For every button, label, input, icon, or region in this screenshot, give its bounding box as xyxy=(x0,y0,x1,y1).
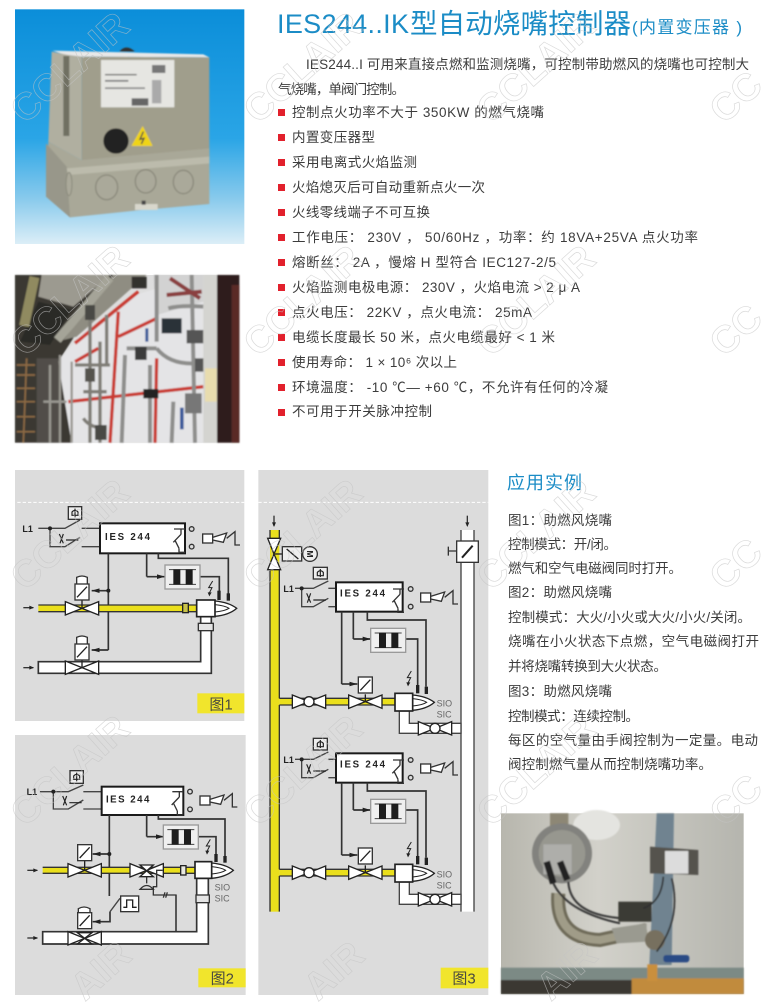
label: L1 input with switches xyxy=(283,738,336,778)
application description text xyxy=(508,512,759,772)
figure label 图1: 图1 xyxy=(209,696,233,713)
icon: spark xyxy=(406,671,411,686)
air pipe xyxy=(23,617,213,674)
burner xyxy=(395,685,434,711)
burner xyxy=(195,854,233,878)
watermark: CC xyxy=(702,297,771,365)
application description text: 图2：助燃风烧嘴 xyxy=(508,584,612,600)
wiring xyxy=(342,783,426,858)
burner zone 1 xyxy=(279,567,461,735)
application description text: 烧嘴在小火状态下点燃，空气电磁阀打开 xyxy=(508,633,759,649)
icon: ignition transformer xyxy=(163,825,198,849)
gas branch xyxy=(279,677,396,708)
SIO SIC labels: SIC xyxy=(437,880,452,890)
gas pipe xyxy=(23,576,198,615)
icon: alarm horn xyxy=(200,794,237,807)
label: L1 input with switches: L1 xyxy=(283,755,294,765)
icon: alarm horn xyxy=(203,532,240,545)
title: (内置变压器 ) xyxy=(632,18,742,37)
panel: diagram 1 xyxy=(15,470,244,721)
label: L1 input with switches: L1 xyxy=(22,524,33,534)
application description text: 控制模式：大火/小火或大火/小火/关闭。 xyxy=(508,610,751,625)
feature bullet list: 控制点火功率不大于 350KW 的燃气烧嘴 xyxy=(292,104,544,120)
intro paragraph: 气烧嘴，单阀门控制。 xyxy=(278,82,405,97)
figure label 图3: 图3 xyxy=(452,970,476,987)
SIO SIC labels: SIC xyxy=(215,893,230,903)
feature bullet list: 火焰熄灭后可自动重新点火一次 xyxy=(292,179,485,195)
control unit IES 244: IES 244 xyxy=(340,759,386,770)
pulse controller xyxy=(110,896,139,912)
control unit IES 244 xyxy=(100,523,194,553)
control unit IES 244 xyxy=(336,582,413,612)
feature bullet list: 环境温度： -10 ℃— +60 ℃，不允许有任何的冷凝 xyxy=(292,380,608,395)
icon: alarm horn xyxy=(421,762,458,775)
watermark: CCLAIR xyxy=(469,237,604,365)
wiring xyxy=(342,612,426,687)
feature bullet list: 使用寿命： 1 × 10⁶ 次以上 xyxy=(292,354,457,370)
watermark: CCLAIR xyxy=(469,471,604,599)
feature bullet list: 不可用于开关脉冲控制 xyxy=(292,404,432,419)
SIO SIC labels xyxy=(437,699,452,719)
icon: ignition transformer xyxy=(371,628,406,652)
control unit IES 244: IES 244 xyxy=(340,588,386,599)
feature bullet list: 点火电压： 22KV ，点火电流： 25mA xyxy=(292,305,532,320)
label: L1 input with switches: L1 xyxy=(283,584,294,594)
main air pipe xyxy=(448,516,478,912)
application description text: 燃气和空气电磁阀同时打开。 xyxy=(508,560,682,576)
SIO SIC labels: SIO xyxy=(437,870,452,880)
application description text: 控制模式：连续控制。 xyxy=(508,709,639,724)
main gas pipe xyxy=(268,516,317,912)
control unit IES 244: IES 244 xyxy=(105,532,151,543)
watermark: CCLAIR xyxy=(236,707,371,835)
feature bullet list: 火焰监测电极电源： 230V ，火焰电流 > 2 μ A xyxy=(292,280,580,295)
label: L1 input with switches xyxy=(283,567,336,607)
burner zone 2 xyxy=(279,738,461,906)
burner xyxy=(395,856,434,882)
main gas pipe: M xyxy=(305,550,315,558)
title xyxy=(277,8,742,39)
icon: spark xyxy=(205,839,210,855)
icon: ignition transformer xyxy=(371,799,406,823)
figure label 图2: 图2 xyxy=(211,970,234,987)
watermark: CCLAIR xyxy=(236,237,371,365)
label: L1 input with switches: L1 xyxy=(27,787,37,797)
SIO SIC labels xyxy=(215,882,230,903)
control unit IES 244: IES 244 xyxy=(106,795,150,806)
feature bullet list: 工作电压： 230V ， 50/60Hz ，功率：约 18VA+25VA 点火功率 xyxy=(292,229,698,245)
figure label 图3 xyxy=(441,968,488,988)
watermark: CCLAIR xyxy=(3,237,138,365)
photo: installed burner with controller xyxy=(501,810,744,994)
application description text: 图3：助燃风烧嘴 xyxy=(508,683,612,699)
label: L1 input with switches xyxy=(22,507,100,547)
photo: burner installation with pipes and red frames xyxy=(15,275,239,443)
application description text: 图1：助燃风烧嘴 xyxy=(508,512,612,528)
watermark: CCLAIR xyxy=(3,471,138,599)
figure label 图1 xyxy=(197,693,244,713)
watermark: CCLAIR xyxy=(236,4,371,132)
feature bullet list: 电缆长度最长 50 米，点火电缆最好 < 1 米 xyxy=(292,330,556,345)
watermark: CCLAIR xyxy=(3,707,138,835)
watermark: CCLAIR xyxy=(469,707,604,835)
watermark: CCLAIR xyxy=(3,4,138,132)
application description text: 每区的空气量由手阀控制为一定量。电动 xyxy=(508,733,758,748)
title: IES244..IK xyxy=(277,9,409,39)
feature bullet list: 火线零线端子不可互换 xyxy=(292,205,430,220)
gas branch xyxy=(279,848,396,879)
icon: alarm horn xyxy=(421,591,458,604)
watermark: CC xyxy=(702,767,771,835)
gas pipe xyxy=(27,845,196,932)
application description text: 阀控制燃气量从而控制烧嘴功率。 xyxy=(508,756,712,772)
panel: diagram 3 xyxy=(258,470,488,995)
application description text: 并将烧嘴转换到大火状态。 xyxy=(508,659,667,674)
SIO SIC labels: SIO xyxy=(437,699,452,709)
burner xyxy=(197,591,237,617)
watermark: CCLAIR xyxy=(469,4,604,132)
icon: spark xyxy=(406,842,411,857)
watermark: CC xyxy=(702,64,771,132)
panel: diagram 2 xyxy=(15,735,246,995)
watermark: CC xyxy=(702,531,771,599)
watermark: CCLAIR xyxy=(236,471,371,599)
feature bullet list: 熔断丝： 2A ，慢熔 H 型符合 IEC127-2/5 xyxy=(292,254,556,270)
icon: spark xyxy=(208,581,213,596)
control unit IES 244 xyxy=(102,787,192,815)
SIO SIC labels xyxy=(437,870,452,890)
control unit IES 244 xyxy=(336,753,413,783)
heading: application examples: 应用实例 xyxy=(507,473,582,493)
figure label 图2 xyxy=(198,968,246,987)
air branch xyxy=(399,711,461,735)
feature bullet list: 内置变压器型 xyxy=(292,130,375,145)
intro paragraph xyxy=(278,56,749,97)
wiring and arrows xyxy=(93,815,225,896)
SIO SIC labels: SIC xyxy=(437,709,452,719)
wiring and arrows xyxy=(92,553,228,650)
title: 型自动烧嘴控制器 xyxy=(410,8,631,39)
intro paragraph: IES244..I 可用来直接点燃和监测烧嘴，可控制带助燃风的烧嘴也可控制大 xyxy=(306,56,749,72)
air pipe xyxy=(27,878,209,945)
icon: ignition transformer xyxy=(165,565,200,589)
application description text: 控制模式：开/闭。 xyxy=(508,537,617,552)
label: L1 input with switches xyxy=(27,771,102,809)
SIO SIC labels: SIO xyxy=(215,882,230,892)
photo: IES244 controller on blue background xyxy=(15,9,244,244)
air branch xyxy=(399,882,461,906)
feature bullet list xyxy=(278,104,698,419)
feature bullet list: 采用电离式火焰监测 xyxy=(292,154,417,170)
